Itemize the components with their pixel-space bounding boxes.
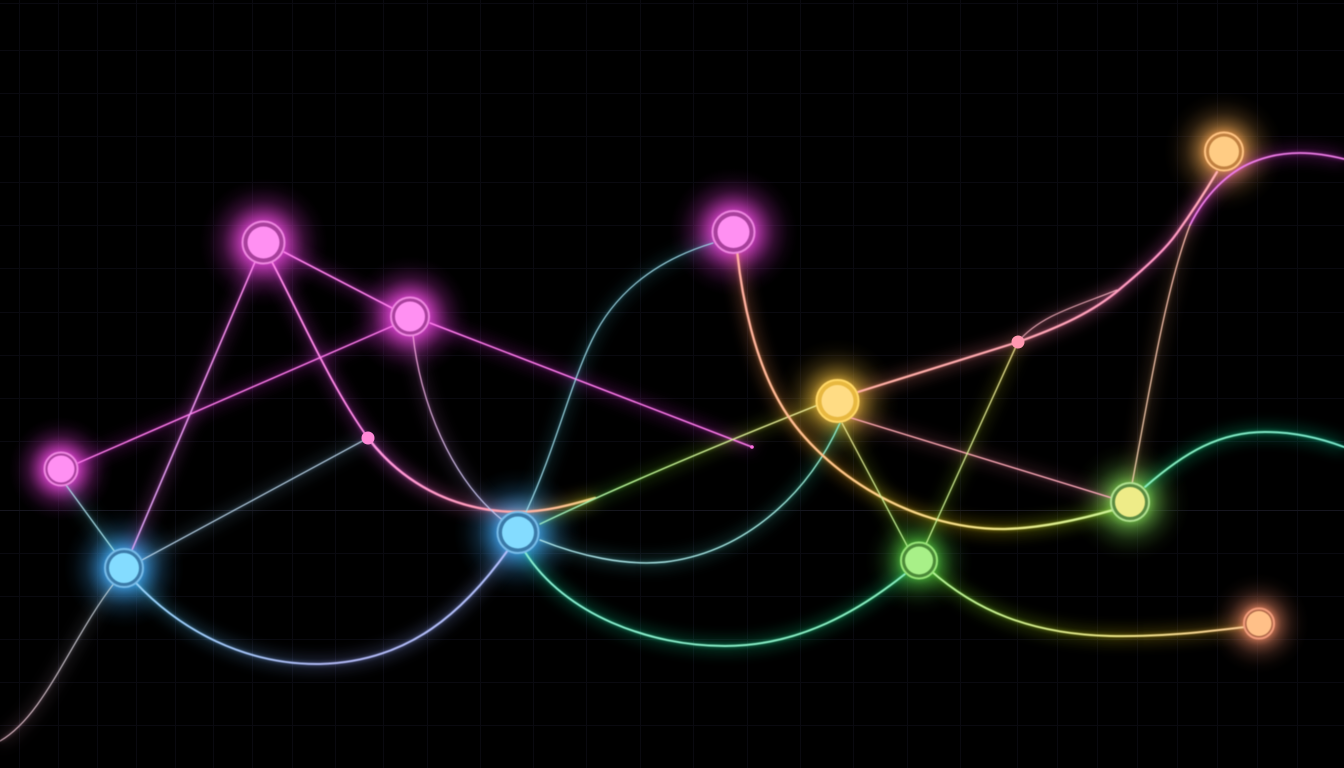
small endpoint: magenta line end [750,445,754,449]
node: yellow-green right [1111,483,1149,521]
node: orange top right [1205,132,1243,170]
node: yellow centre [816,380,858,422]
node: green [901,542,937,578]
node: magenta centre left [391,298,429,336]
small junction: pink left [362,432,374,444]
node halos [9,92,1309,674]
glowing connection curves [0,153,1344,741]
node: blue left [105,549,143,587]
small junction: pink right [1012,336,1024,348]
node: orange bottom right [1244,608,1274,638]
node: magenta top left [242,222,284,264]
node: blue centre [498,512,538,553]
node: magenta far left [44,452,78,486]
node: magenta top centre [712,211,754,253]
